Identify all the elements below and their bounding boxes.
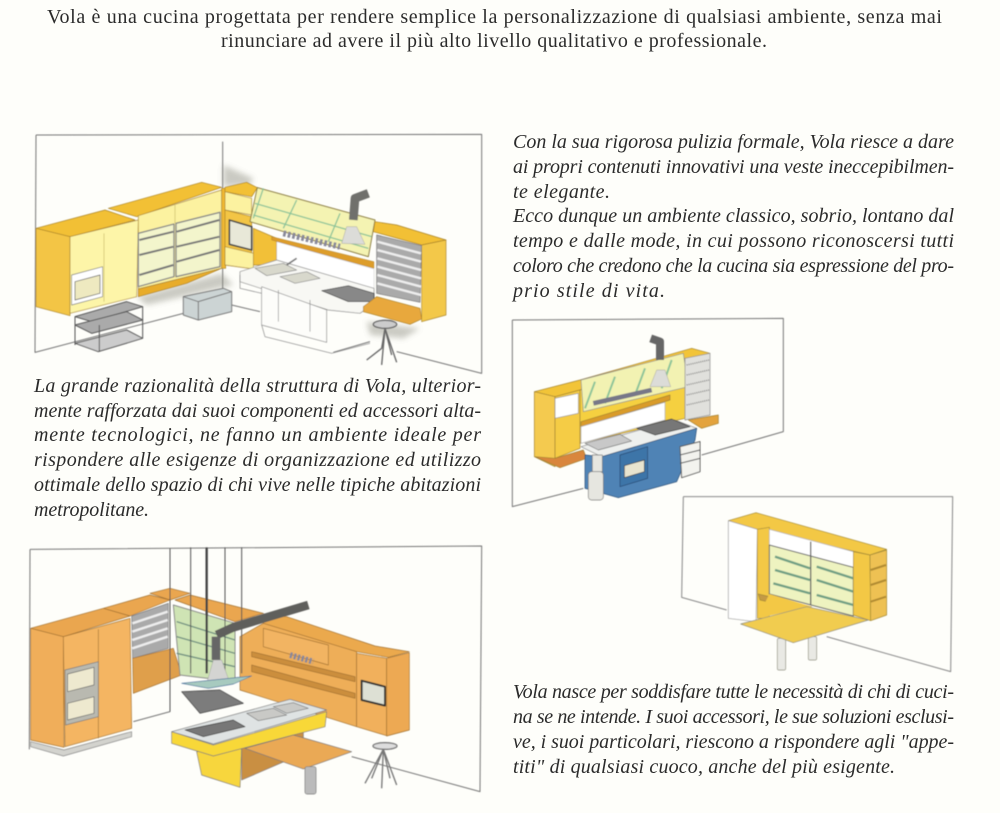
- paragraph: necessità: na se ne intende. I suoi accessori, le sue soluzioni esclusi-: [513, 706, 954, 728]
- island: [240, 258, 374, 353]
- corner and floor shadows: [137, 165, 420, 338]
- room outline: [512, 318, 783, 507]
- paragraph: pulizia formale: prio stile di vita.: [511, 280, 665, 302]
- paragraph: pulizia formale: Con la sua rigorosa pulizia formale, Vola riesce a dare: [513, 131, 954, 153]
- blue counter: [581, 419, 697, 498]
- side trolley: [680, 442, 700, 478]
- illustration: yellow dresser with table: [682, 497, 953, 672]
- bin: [588, 455, 603, 500]
- illustration: yellow corner kitchen: [35, 134, 482, 373]
- paragraph: necessità: titi" di qualsiasi cuoco, anche del più esigente.: [513, 756, 895, 778]
- backsplash: [277, 242, 374, 292]
- intro text: [47, 6, 942, 52]
- trolley: [75, 302, 143, 352]
- paragraph: necessità: Vola nasce per soddisfare tutte le necessità di chi di cuci-: [513, 681, 954, 703]
- paragraph: razionalità: mente rafforzata dai suoi componenti ed accessori alta-: [34, 400, 481, 422]
- intro text: Vola è una cucina progettata per rendere semplice la personalizzazione di qualsiasi ambiente, senza mai: [47, 6, 942, 28]
- paragraph: razionalità: La grande razionalità della struttura di Vola, ulterior-: [33, 375, 481, 397]
- glass hood: [250, 188, 375, 268]
- paragraph: razionalità: ottimale dello spazio di chi vive nelle tipiche abitazioni: [34, 474, 481, 496]
- paragraph: razionalità: [33, 375, 481, 521]
- paragraph: necessità: [513, 681, 954, 778]
- left cabinets: [36, 182, 277, 316]
- wall unit: [534, 348, 718, 468]
- paragraph: razionalità: metropolitane.: [34, 499, 149, 521]
- right cabinet: [363, 222, 446, 324]
- paragraph: razionalità: mente tecnologici, ne fanno un ambiente ideale per: [34, 424, 481, 446]
- duct and lamp: [650, 338, 671, 387]
- paragraph: pulizia formale: Ecco dunque un ambiente classico, sobrio, lontano dal: [512, 205, 954, 227]
- paragraph: pulizia formale: tempo e dalle mode, in cui possono riconoscersi tutti: [513, 230, 954, 252]
- island: [172, 699, 352, 794]
- intro text: rinunciare ad avere il più alto livello qualitativo e professionale.: [221, 30, 767, 52]
- hood with poles: [170, 547, 308, 713]
- illustration: orange kitchen with island: [29, 546, 482, 794]
- paragraph: pulizia formale: coloro che credono che la cucina sia espressione del pro-: [513, 255, 954, 277]
- back cabinets: [103, 588, 409, 736]
- basket: [183, 288, 232, 320]
- paragraph: pulizia formale: te elegante.: [513, 181, 610, 203]
- paragraph: necessità: ve, i suoi particolari, riescono a rispondere agli "appe-: [513, 731, 954, 753]
- table: [741, 607, 868, 670]
- room outline: [35, 134, 482, 373]
- illustration: blue linear kitchen: [512, 318, 783, 507]
- stool: [365, 743, 397, 788]
- cabinet: [728, 513, 887, 622]
- room outline: [29, 546, 482, 792]
- paragraph: pulizia formale: ai propri contenuti innovativi una veste ineccepibilmen-: [513, 156, 954, 178]
- paragraph: razionalità: rispondere alle esigenze di organizzazione ed utilizzo: [34, 449, 481, 471]
- room outline: [682, 497, 953, 672]
- stool: [367, 320, 397, 365]
- paragraph: pulizia formale: [511, 131, 954, 302]
- tall unit: [31, 608, 132, 756]
- duct and lamp: [342, 193, 368, 244]
